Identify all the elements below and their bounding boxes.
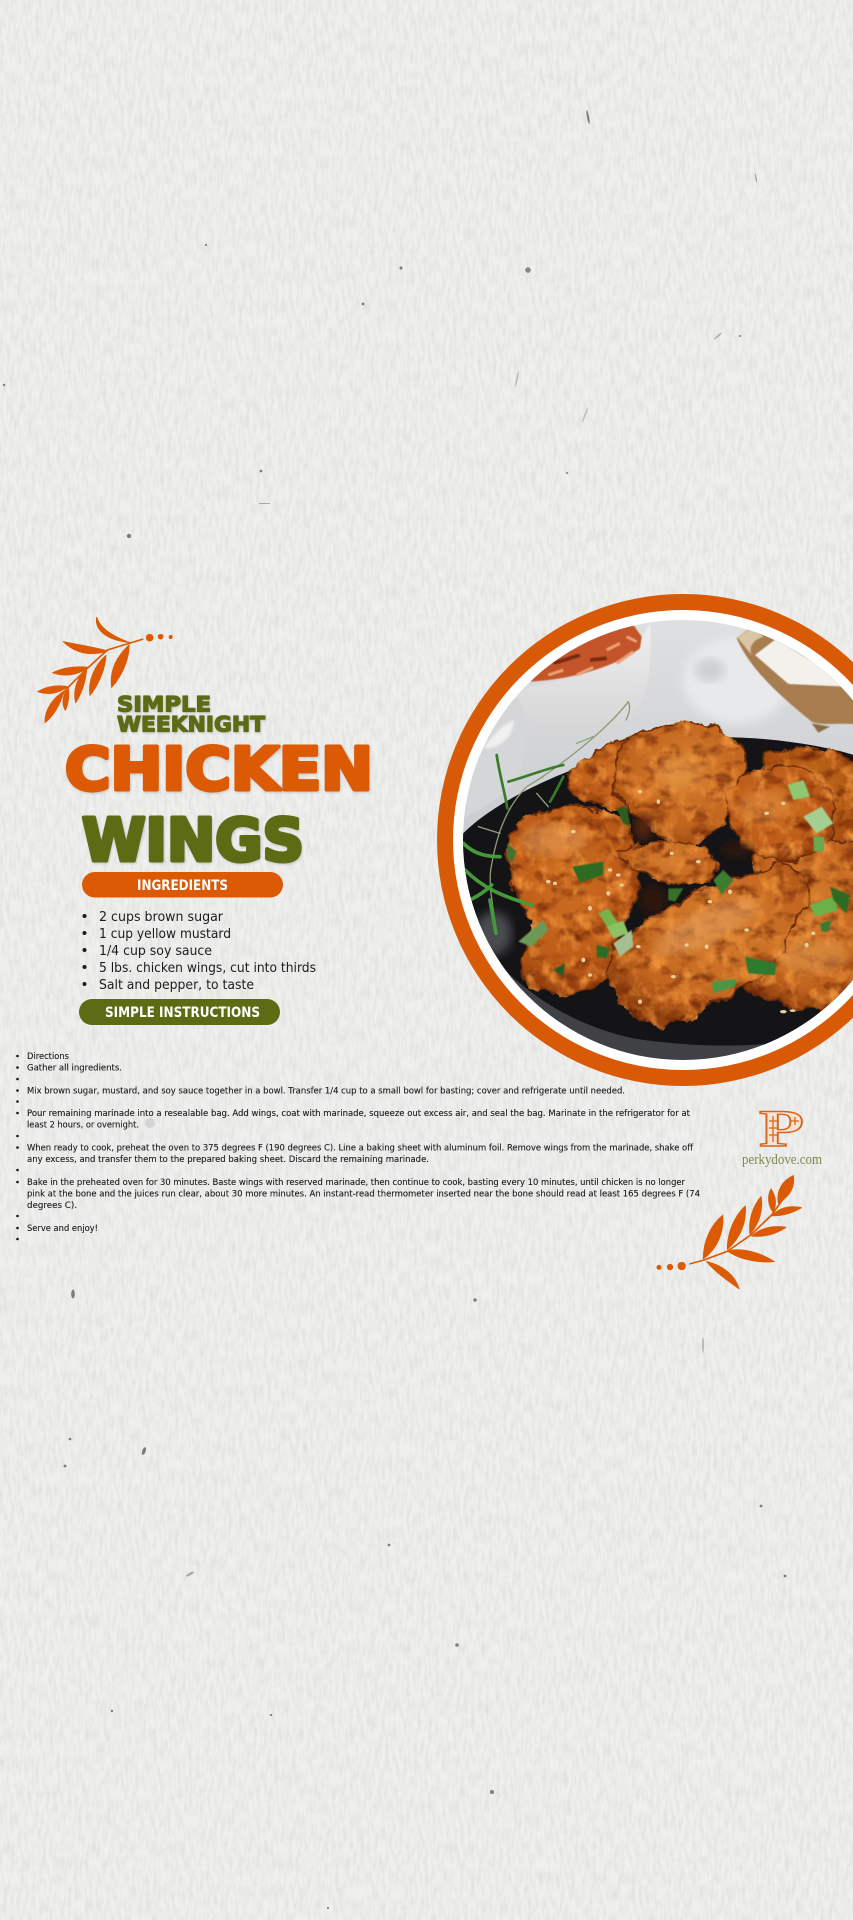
wooden bowl with rice <box>737 623 853 733</box>
title: simple weeknight <box>117 692 265 737</box>
directions list: any excess, and transfer them to the prepared baking sheet. Discard the remaining marinade. <box>27 1155 429 1165</box>
instructions heading pill: SIMPLE INSTRUCTIONS <box>105 1005 260 1021</box>
instructions heading pill <box>79 999 280 1025</box>
ingredients list: 2 cups brown sugar <box>99 910 223 925</box>
title: simple weeknight: SIMPLE <box>117 692 211 717</box>
ingredients heading pill: INGREDIENTS <box>137 878 228 894</box>
ingredients list: Salt and pepper, to taste <box>99 978 254 993</box>
title: chicken: CHICKEN <box>65 735 373 803</box>
directions list: degrees C). <box>27 1201 77 1211</box>
directions list: Mix brown sugar, mustard, and soy sauce together in a bowl. Transfer 1/4 cup to a small bowl for basting; cover and refrigerate until needed. <box>27 1087 625 1097</box>
directions list: pink at the bone and the juices run clear, about 30 more minutes. An instant-read thermometer inserted near the bone should read at least 165 degrees F (74 <box>27 1190 700 1200</box>
directions list: Directions <box>27 1052 69 1062</box>
directions list: Serve and enjoy! <box>27 1224 98 1234</box>
directions list: Pour remaining marinade into a resealable bag. Add wings, coat with marinade, squeeze out excess air, and seal the bag. Marinate in the refrigerator for at <box>27 1109 691 1119</box>
leaf sprig: top left <box>38 617 172 723</box>
directions list: Bake in the preheated oven for 30 minutes. Baste wings with reserved marinade, then continue to cook, basting every 10 minutes, until chicken is no longer <box>27 1178 685 1188</box>
directions list: least 2 hours, or overnight. <box>27 1120 139 1130</box>
bowl of kimchi <box>530 625 650 683</box>
plate <box>460 737 853 1046</box>
photo: chicken wings on a dark plate <box>453 613 853 1080</box>
circular photo frame <box>437 594 853 1086</box>
sesame seeds <box>546 790 815 1013</box>
title: simple weeknight: WEEKNIGHT <box>117 712 265 737</box>
ingredients list: 1/4 cup soy sauce <box>99 944 212 959</box>
logo letter P: P <box>759 1100 804 1158</box>
directions list <box>16 1052 700 1240</box>
title: wings: WINGS <box>82 806 304 874</box>
wings <box>508 723 853 1027</box>
scallions <box>507 780 850 993</box>
logo: perkydove <box>742 1100 823 1168</box>
ingredients list <box>82 910 316 993</box>
ingredients list: 5 lbs. chicken wings, cut into thirds <box>99 961 316 976</box>
leaf sprig: bottom right <box>657 1176 801 1289</box>
logo: perkydove: perkydove.com <box>742 1152 823 1168</box>
directions list: Gather all ingredients. <box>27 1064 122 1074</box>
ingredients list: 1 cup yellow mustard <box>99 927 231 942</box>
small white dish <box>464 700 515 816</box>
ingredients heading pill <box>82 872 283 898</box>
directions list: When ready to cook, preheat the oven to 375 degrees F (190 degrees C). Line a baking sheet with aluminum foil. Remove wings from the marinade, shake off <box>27 1143 694 1153</box>
herbs <box>463 702 630 933</box>
